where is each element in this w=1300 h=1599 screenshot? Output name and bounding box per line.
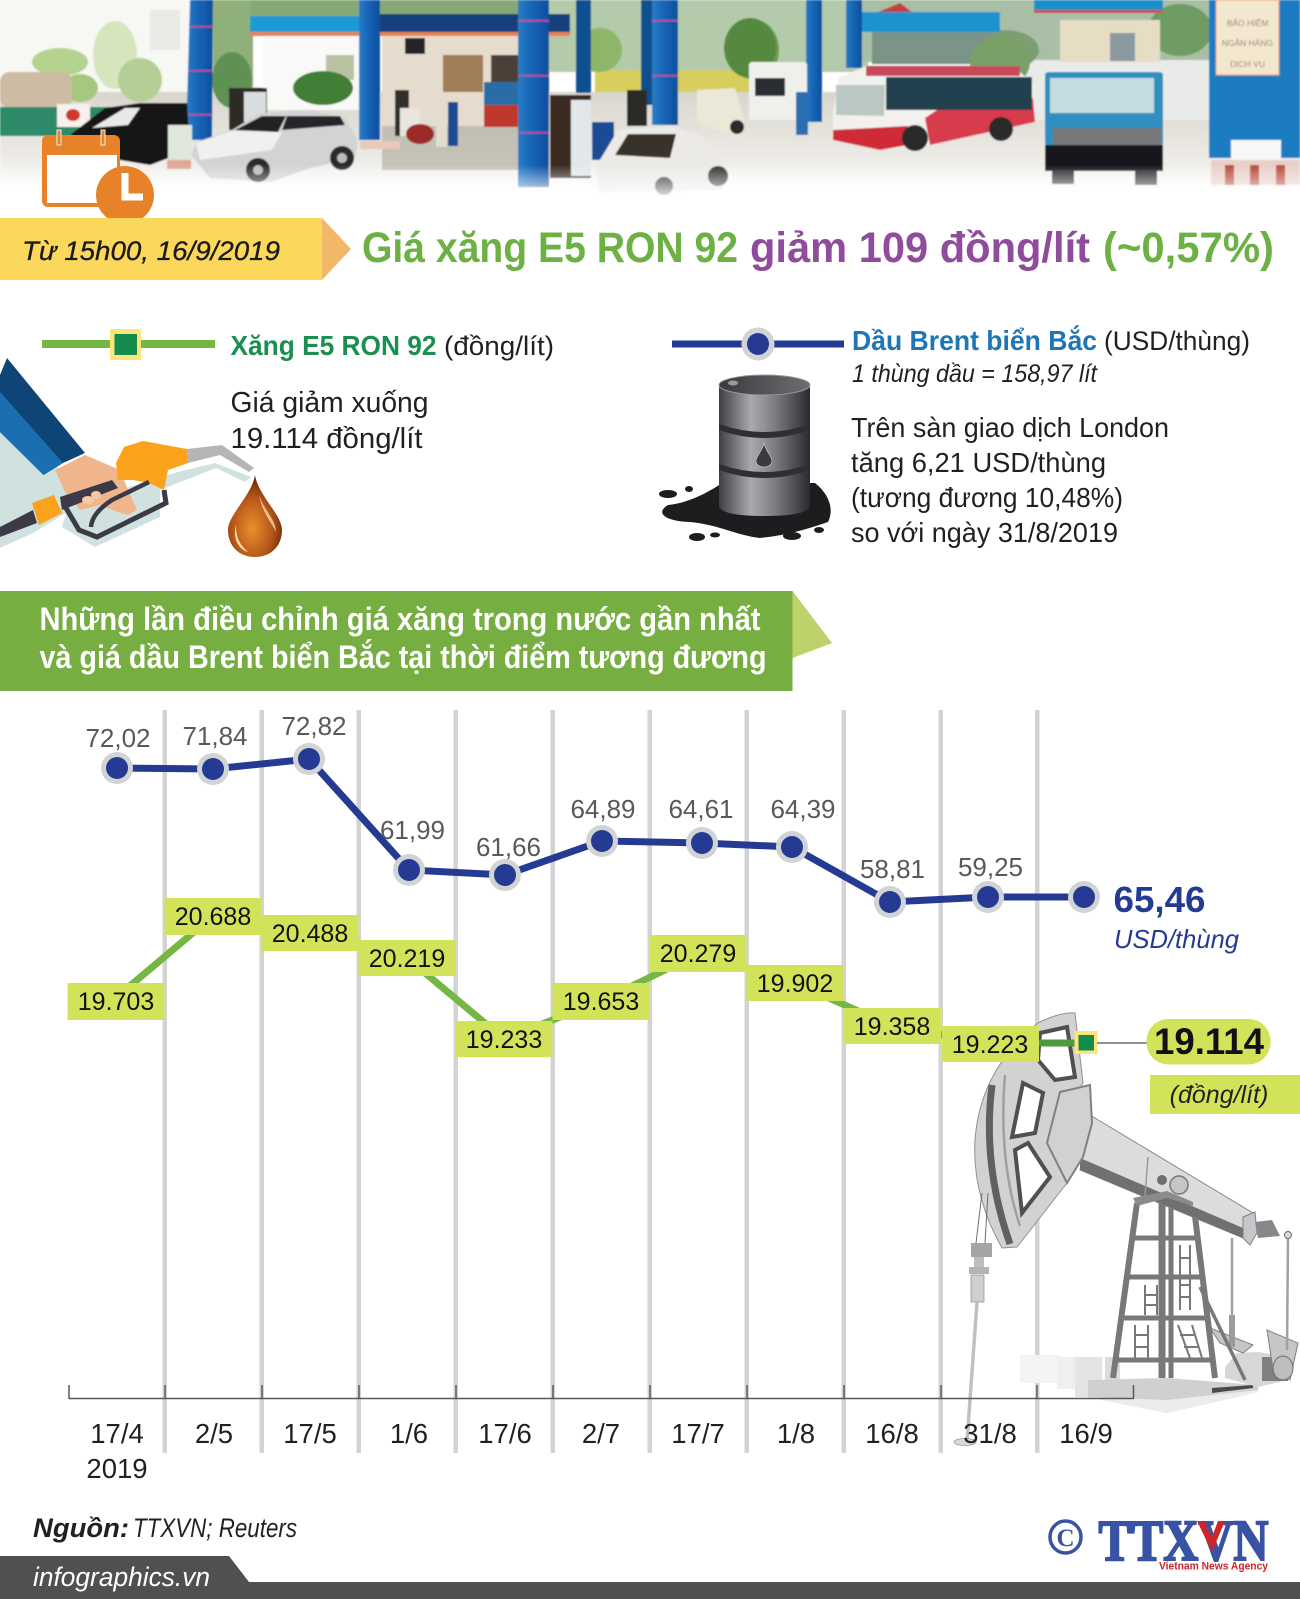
title: (~0,57%) <box>1103 224 1274 272</box>
photo: petrol station forecourt: DỊCH VỤ <box>1230 59 1265 69</box>
Brent price line <box>101 743 1100 918</box>
title: giảm 109 đồng/lít <box>750 224 1090 272</box>
tower <box>1113 1198 1245 1380</box>
gasoline price labels: 19.358 <box>854 1013 930 1041</box>
footer bar <box>0 1556 1300 1599</box>
callout: latest gasoline price: 19.114 <box>1154 1021 1264 1062</box>
axis labels: 1/8 <box>777 1418 815 1449</box>
Brent price labels: 64,61 <box>668 794 734 824</box>
icon: oil drop <box>228 475 282 557</box>
bus <box>833 66 1035 150</box>
last gasoline marker <box>1074 1031 1098 1054</box>
source: TTXVN; Reuters <box>133 1513 297 1543</box>
Brent price labels: 72,02 <box>85 723 151 753</box>
gasoline price line <box>112 916 1148 1054</box>
columns <box>186 0 213 140</box>
legend: gasoline E5 RON 92: Xăng E5 RON 92 <box>230 330 436 361</box>
section heading banner: Những lần điều chỉnh giá xăng trong nước gần nhất <box>40 601 761 637</box>
photo: petrol station forecourt: BẢO HIỂM <box>1227 17 1268 28</box>
silver suv <box>191 110 358 182</box>
legend: Brent crude <box>672 325 1250 388</box>
Brent price labels: 71,84 <box>182 721 248 751</box>
logo: TTXVN: Vietnam News Agency <box>1159 1560 1269 1572</box>
source <box>33 1513 297 1543</box>
legend: gasoline E5 RON 92: (đồng/lít) <box>444 331 554 361</box>
axis labels <box>86 1418 1113 1484</box>
text: Brent crude description: (tương đương 10,48%) <box>851 482 1123 513</box>
legend: Brent crude: (USD/thùng) <box>1104 326 1250 356</box>
axis labels: 16/9 <box>1059 1418 1113 1449</box>
icon: fuel nozzle in hand <box>0 358 254 548</box>
callout: latest gasoline price <box>1146 1019 1300 1114</box>
gasoline price labels <box>68 898 1039 1062</box>
axis labels: 17/7 <box>671 1418 725 1449</box>
gasoline price labels: 19.902 <box>757 970 833 998</box>
axis labels: 17/5 <box>283 1418 337 1449</box>
small white car <box>595 126 725 193</box>
text: gasoline price: 19.114 đồng/lít <box>230 423 422 455</box>
text: gasoline price: Giá giảm xuống <box>230 387 428 419</box>
cables and rod <box>976 1193 982 1243</box>
source: Nguồn: <box>33 1513 129 1543</box>
truck <box>1045 72 1163 146</box>
gasoline price labels: 20.488 <box>272 920 348 948</box>
text: Brent crude description: Trên sàn giao dịch London <box>851 412 1169 443</box>
sign tower <box>1209 0 1300 158</box>
callout: latest Brent price <box>1114 879 1240 954</box>
photo: petrol station forecourt <box>0 0 1300 195</box>
axis labels: 2/7 <box>582 1418 620 1449</box>
Brent price labels: 61,66 <box>476 832 541 862</box>
axis labels: 17/4 <box>90 1418 144 1449</box>
Brent price labels: 72,82 <box>281 711 347 741</box>
Brent price labels: 58,81 <box>860 854 925 884</box>
white building and shop <box>263 32 363 110</box>
chart axis <box>69 1385 1134 1399</box>
trees left <box>93 21 137 89</box>
white van and truck <box>697 88 744 138</box>
workers <box>592 122 614 160</box>
axis labels: 2/5 <box>195 1418 233 1449</box>
bottom fade <box>0 165 1300 195</box>
axis labels: 17/6 <box>478 1418 532 1449</box>
text: Brent crude description: so với ngày 31/8/2019 <box>851 517 1118 548</box>
icon: calendar with clock <box>42 130 154 224</box>
section heading banner <box>0 591 832 691</box>
legend: Brent crude: Dầu Brent biển Bắc <box>852 325 1097 356</box>
axis labels: 1/6 <box>390 1418 428 1449</box>
logo: TTXVN <box>1050 1508 1269 1573</box>
text: gasoline price <box>230 387 428 455</box>
chart grid <box>162 710 1040 1453</box>
date ribbon: Từ 15h00, 16/9/2019 <box>22 236 280 266</box>
people <box>436 105 447 147</box>
section heading banner: và giá dầu Brent biển Bắc tại thời điểm tương đương <box>40 639 766 675</box>
gasoline price labels: 19.233 <box>466 1026 542 1054</box>
photo: petrol station forecourt: NGÂN HÀNG <box>1222 38 1273 48</box>
gearbox <box>1225 1352 1288 1387</box>
text: Brent crude description: tăng 6,21 USD/thùng <box>851 447 1106 478</box>
pale base blocks <box>1020 1355 1060 1383</box>
pivot and platform <box>1157 1175 1167 1185</box>
far canopies <box>861 12 1000 32</box>
gasoline price labels: 19.703 <box>78 988 154 1016</box>
legend: Brent crude: 1 thùng dầu = 158,97 lít <box>852 360 1098 388</box>
logo: TTXVN: C <box>1056 1525 1075 1552</box>
logo: TTXVN: TTXVN <box>1098 1508 1269 1573</box>
gasoline price labels: 19.223 <box>952 1031 1028 1059</box>
callout: latest gasoline price: (đồng/lít) <box>1170 1081 1268 1109</box>
gasoline price labels: 20.688 <box>175 903 251 931</box>
black suv <box>70 103 190 165</box>
axis labels: 31/8 <box>963 1418 1017 1449</box>
Brent price labels <box>85 711 1023 884</box>
Brent price labels: 61,99 <box>380 815 445 845</box>
gasoline price labels: 19.653 <box>563 988 639 1016</box>
date ribbon <box>0 218 351 280</box>
legend: gasoline E5 RON 92 <box>42 329 554 361</box>
footer bar: infographics.vn <box>33 1562 210 1592</box>
Brent price labels: 64,89 <box>570 794 636 824</box>
gasoline price labels: 20.219 <box>369 945 445 973</box>
icon: oil barrel with puddle <box>659 375 831 541</box>
title <box>362 224 1274 272</box>
axis labels: 16/8 <box>865 1418 919 1449</box>
callout: latest Brent price: 65,46 <box>1114 879 1206 920</box>
beam <box>1080 1115 1253 1238</box>
Brent price labels: 59,25 <box>958 852 1023 882</box>
tank and fence <box>0 72 72 108</box>
text: Brent crude description <box>851 412 1169 548</box>
gasoline price labels: 20.279 <box>660 940 736 968</box>
pumps <box>229 88 267 130</box>
counterweights <box>1210 1328 1253 1353</box>
axis labels: 2019 <box>86 1453 148 1484</box>
title: Giá xăng E5 RON 92 <box>362 224 738 272</box>
stripes left <box>360 141 400 149</box>
base <box>1088 1378 1258 1413</box>
Brent price labels: 64,39 <box>770 794 836 824</box>
callout: latest Brent price: USD/thùng <box>1114 924 1240 954</box>
roof <box>250 16 362 32</box>
illustration: oil pumpjack <box>954 1013 1298 1446</box>
horse head <box>975 1013 1083 1248</box>
